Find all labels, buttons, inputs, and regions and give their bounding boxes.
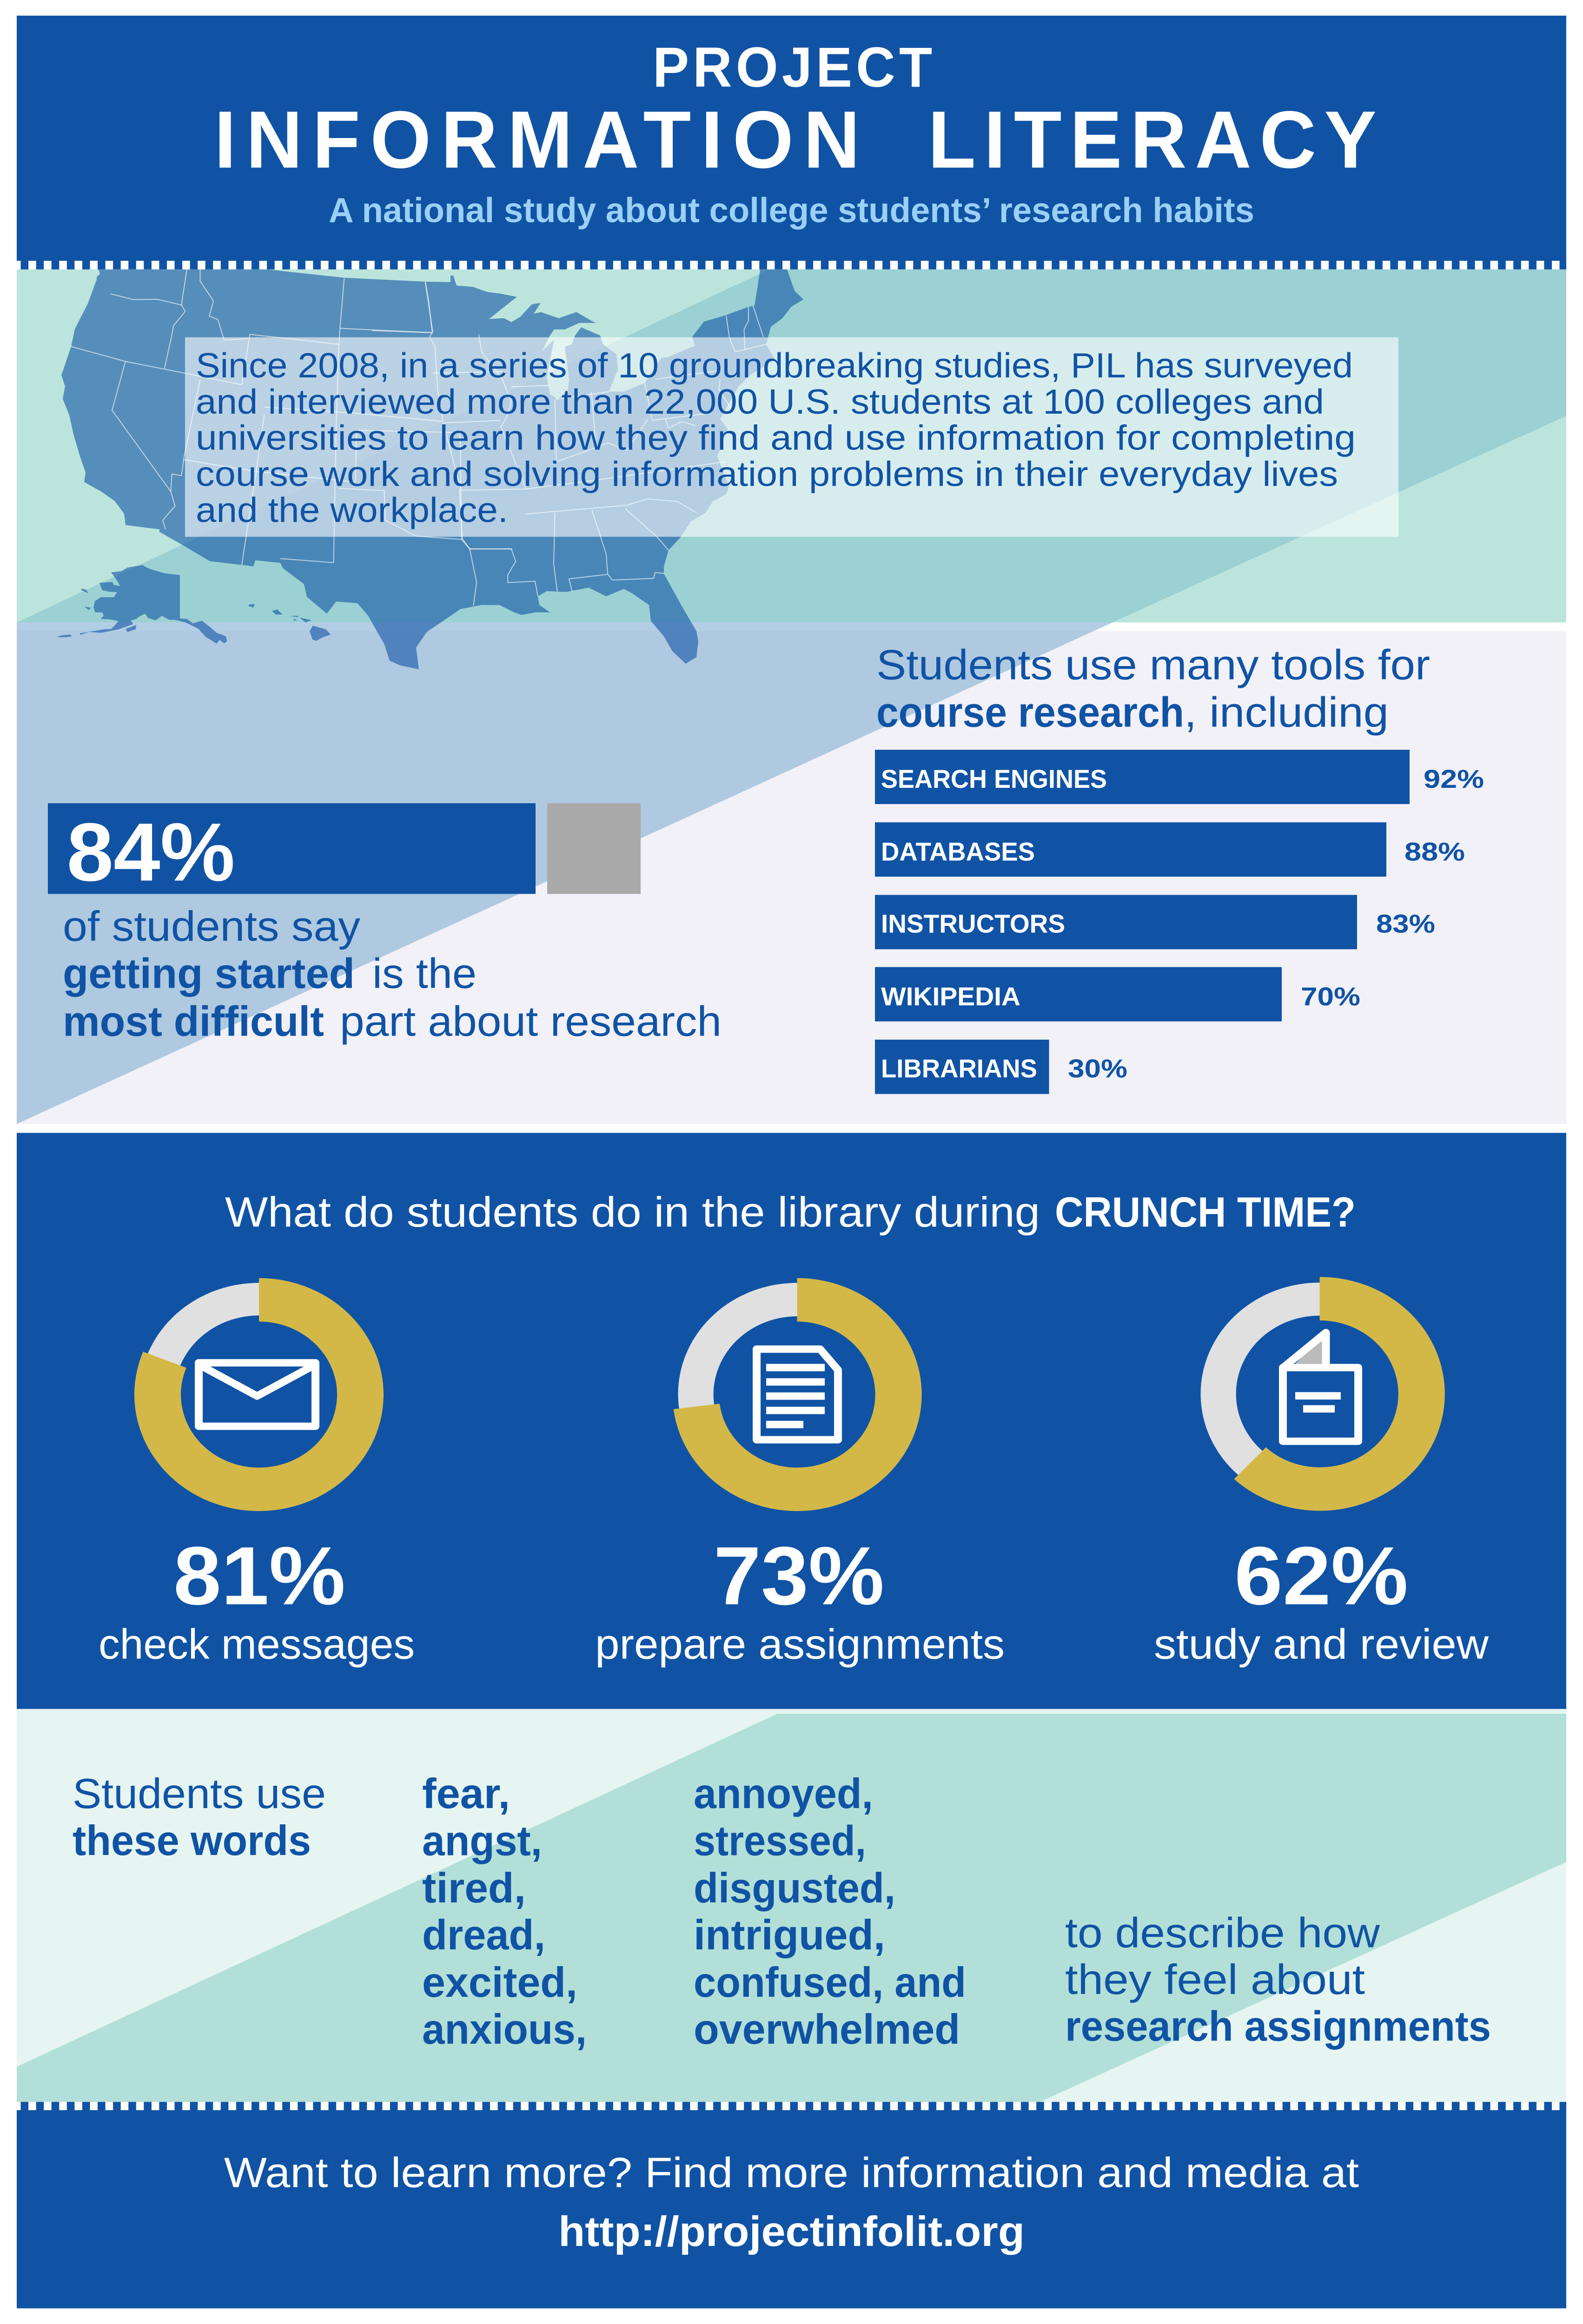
heading: tools (876, 641, 1430, 736)
icon: document (757, 1349, 838, 1440)
panel: course research tools (875, 641, 1484, 1094)
panel: header (17, 16, 1566, 270)
title: information literacy (214, 95, 1377, 185)
text block: introduction: universities to learn how they find and use information for completing (196, 419, 1356, 457)
bar: databases: 88% (1404, 837, 1465, 866)
subtitle: A national study about college students’ research habits (329, 191, 1254, 230)
stat: 62 percent (1154, 1529, 1489, 1668)
word list: column one: excited, (422, 1959, 577, 2006)
bar: search engines: SEARCH ENGINES (881, 765, 1107, 794)
text block: introduction: and interviewed more than 22,000 U.S. students at 100 colleges and (196, 383, 1324, 422)
word list: column two: disgusted, (694, 1864, 895, 1911)
stat: 81 percent: check messages (99, 1620, 415, 1668)
text: website: http://projectinfolit.org (558, 2208, 1025, 2255)
text: research assignments: to describe how (1065, 1909, 1380, 1956)
heading: crunch time: CRUNCH TIME? (1055, 1188, 1356, 1235)
heading: tools: , including (1184, 688, 1389, 736)
panel: footer (17, 2102, 1566, 2308)
word list: column one (422, 1770, 587, 2053)
word list: column one: angst, (422, 1817, 542, 1864)
panel: research difficulty and tools background (17, 622, 1566, 1124)
heading: tools: course research (876, 688, 1184, 736)
stat: 73 percent: 73% (714, 1529, 884, 1622)
bar: librarians: LIBRARIANS (881, 1054, 1037, 1083)
text block: introduction: course work and solving information problems in their everyday lives (196, 455, 1338, 494)
word list: column one: tired, (422, 1864, 526, 1911)
bar: wikipedia: WIKIPEDIA (881, 982, 1020, 1011)
word list: column two: overwhelmed (694, 2006, 960, 2053)
icon: notebook (1283, 1333, 1358, 1441)
icon: envelope (199, 1363, 315, 1426)
stat: 62 percent: study and review (1154, 1620, 1489, 1668)
word list: column two: stressed, (694, 1817, 866, 1864)
bar: databases: DATABASES (881, 837, 1035, 866)
word list: column two (694, 1770, 966, 2053)
panel: introduction background (17, 270, 1566, 622)
text: difficulty statement: part about research (340, 998, 722, 1045)
map: United States (57, 269, 803, 669)
bar: wikipedia: 70% (1301, 982, 1360, 1011)
text: research assignments: research assignments (1065, 2002, 1491, 2050)
text block: introduction (185, 337, 1398, 537)
text: difficulty statement (63, 903, 722, 1045)
text: learn more: Want to learn more? Find more information and media at (224, 2149, 1359, 2196)
stat: 81 percent (99, 1529, 415, 1668)
progress bar: 84 percent (48, 803, 641, 898)
text block: introduction: Since 2008, in a series of 10 groundbreaking studies, PIL has surveyed (196, 347, 1353, 385)
text: difficulty statement: getting started (63, 950, 355, 997)
word list: column two: confused, and (694, 1959, 966, 2006)
text: students use these words: these words (73, 1817, 311, 1864)
stat: 62 percent: 62% (1234, 1529, 1408, 1622)
bar: librarians (875, 1040, 1127, 1094)
donut: check messages 81 percent (134, 1278, 384, 1511)
text: research assignments: they feel about (1065, 1956, 1365, 2003)
progress bar: 84 percent: 84% (67, 805, 235, 898)
text: difficulty statement: most difficult (63, 998, 324, 1045)
stat: 84 percent getting started (48, 803, 722, 1045)
stat: 73 percent (595, 1529, 1005, 1668)
title: project: PROJECT (653, 36, 932, 99)
heading: crunch time: What do students do in the library during (225, 1188, 1040, 1235)
stat: 81 percent: 81% (173, 1529, 345, 1622)
word list: column one: anxious, (422, 2006, 587, 2053)
bar: instructors (875, 895, 1435, 949)
text: research assignments (1065, 1909, 1491, 2050)
bar: search engines (875, 750, 1484, 804)
bar: databases (875, 822, 1465, 877)
title: information literacy: INFORMATION (214, 95, 860, 185)
text: difficulty statement: is the (372, 950, 477, 997)
word list: column one: fear, (422, 1770, 510, 1817)
panel: feelings words (17, 1709, 1566, 2102)
text: students use these words (73, 1770, 326, 1864)
text: students use these words: Students use (73, 1770, 326, 1817)
donut: study and review 62 percent (1201, 1277, 1445, 1511)
bar: search engines: 92% (1424, 765, 1484, 794)
bar: instructors: INSTRUCTORS (881, 910, 1065, 938)
stat: 73 percent: prepare assignments (595, 1620, 1005, 1668)
word list: column two: annoyed, (694, 1770, 873, 1817)
panel: crunch time (17, 1133, 1566, 1709)
donut: prepare assignments 73 percent (674, 1278, 922, 1511)
word list: column one: dread, (422, 1911, 545, 1958)
bar: librarians: 30% (1068, 1054, 1127, 1083)
heading: tools: Students use many tools for (876, 641, 1430, 688)
bar: instructors: 83% (1376, 910, 1435, 938)
word list: column two: intrigued, (694, 1911, 885, 1958)
text: difficulty statement: of students say (63, 903, 360, 950)
title: information literacy: LITERACY (928, 95, 1377, 185)
text block: introduction: and the workplace. (196, 491, 508, 529)
bar: wikipedia (875, 967, 1360, 1021)
